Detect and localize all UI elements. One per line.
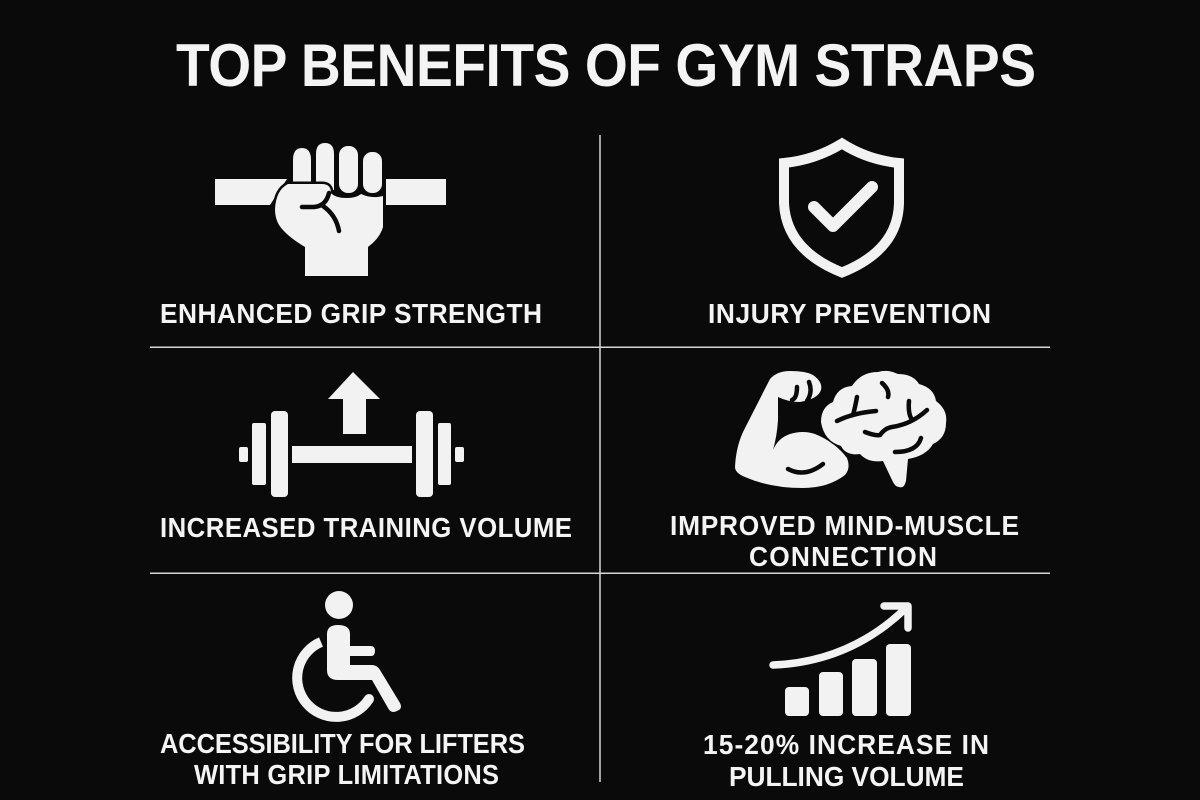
- icon: barbell with up arrow: [239, 372, 464, 497]
- title: TOP BENEFITS OF GYM STRAPS: [176, 33, 1036, 100]
- label: increased training volume: INCREASED TRAINING VOLUME: [160, 512, 572, 543]
- label: enhanced grip strength: ENHANCED GRIP STRENGTH: [160, 297, 542, 329]
- icon: shield with check: [784, 144, 899, 272]
- label: accessibility for lifters with grip limitations: WITH GRIP LIMITATIONS: [194, 759, 499, 790]
- panel: improved mind-muscle connection: [670, 371, 1019, 572]
- icon: wheelchair user: [297, 591, 401, 717]
- panel: accessibility: [160, 591, 525, 790]
- label: injury prevention: INJURY PREVENTION: [708, 297, 991, 329]
- label: improved mind-muscle connection: [670, 509, 1019, 572]
- icon: fist gripping bar: [215, 143, 446, 276]
- panel: enhanced grip strength: [160, 143, 542, 329]
- panel: increased training volume: [160, 372, 572, 543]
- icon: rising bar chart with arrow: [773, 606, 911, 716]
- icon: flexed arm and brain: [735, 371, 946, 488]
- panel: injury prevention: [708, 144, 991, 329]
- label: 15-20% increase in pulling volume: 15-20% INCREASE IN: [703, 728, 989, 760]
- label: 15-20% increase in pulling volume: [703, 728, 989, 792]
- label: improved mind-muscle connection: IMPROVED MIND-MUSCLE: [670, 509, 1019, 541]
- label: 15-20% increase in pulling volume: PULLING VOLUME: [729, 760, 964, 792]
- label: accessibility for lifters with grip limitations: ACCESSIBILITY FOR LIFTERS: [160, 728, 525, 759]
- label: accessibility for lifters with grip limitations: [160, 728, 525, 790]
- panel: 15-20% increase in pulling volume: [703, 606, 989, 792]
- label: improved mind-muscle connection: CONNECTION: [749, 540, 937, 572]
